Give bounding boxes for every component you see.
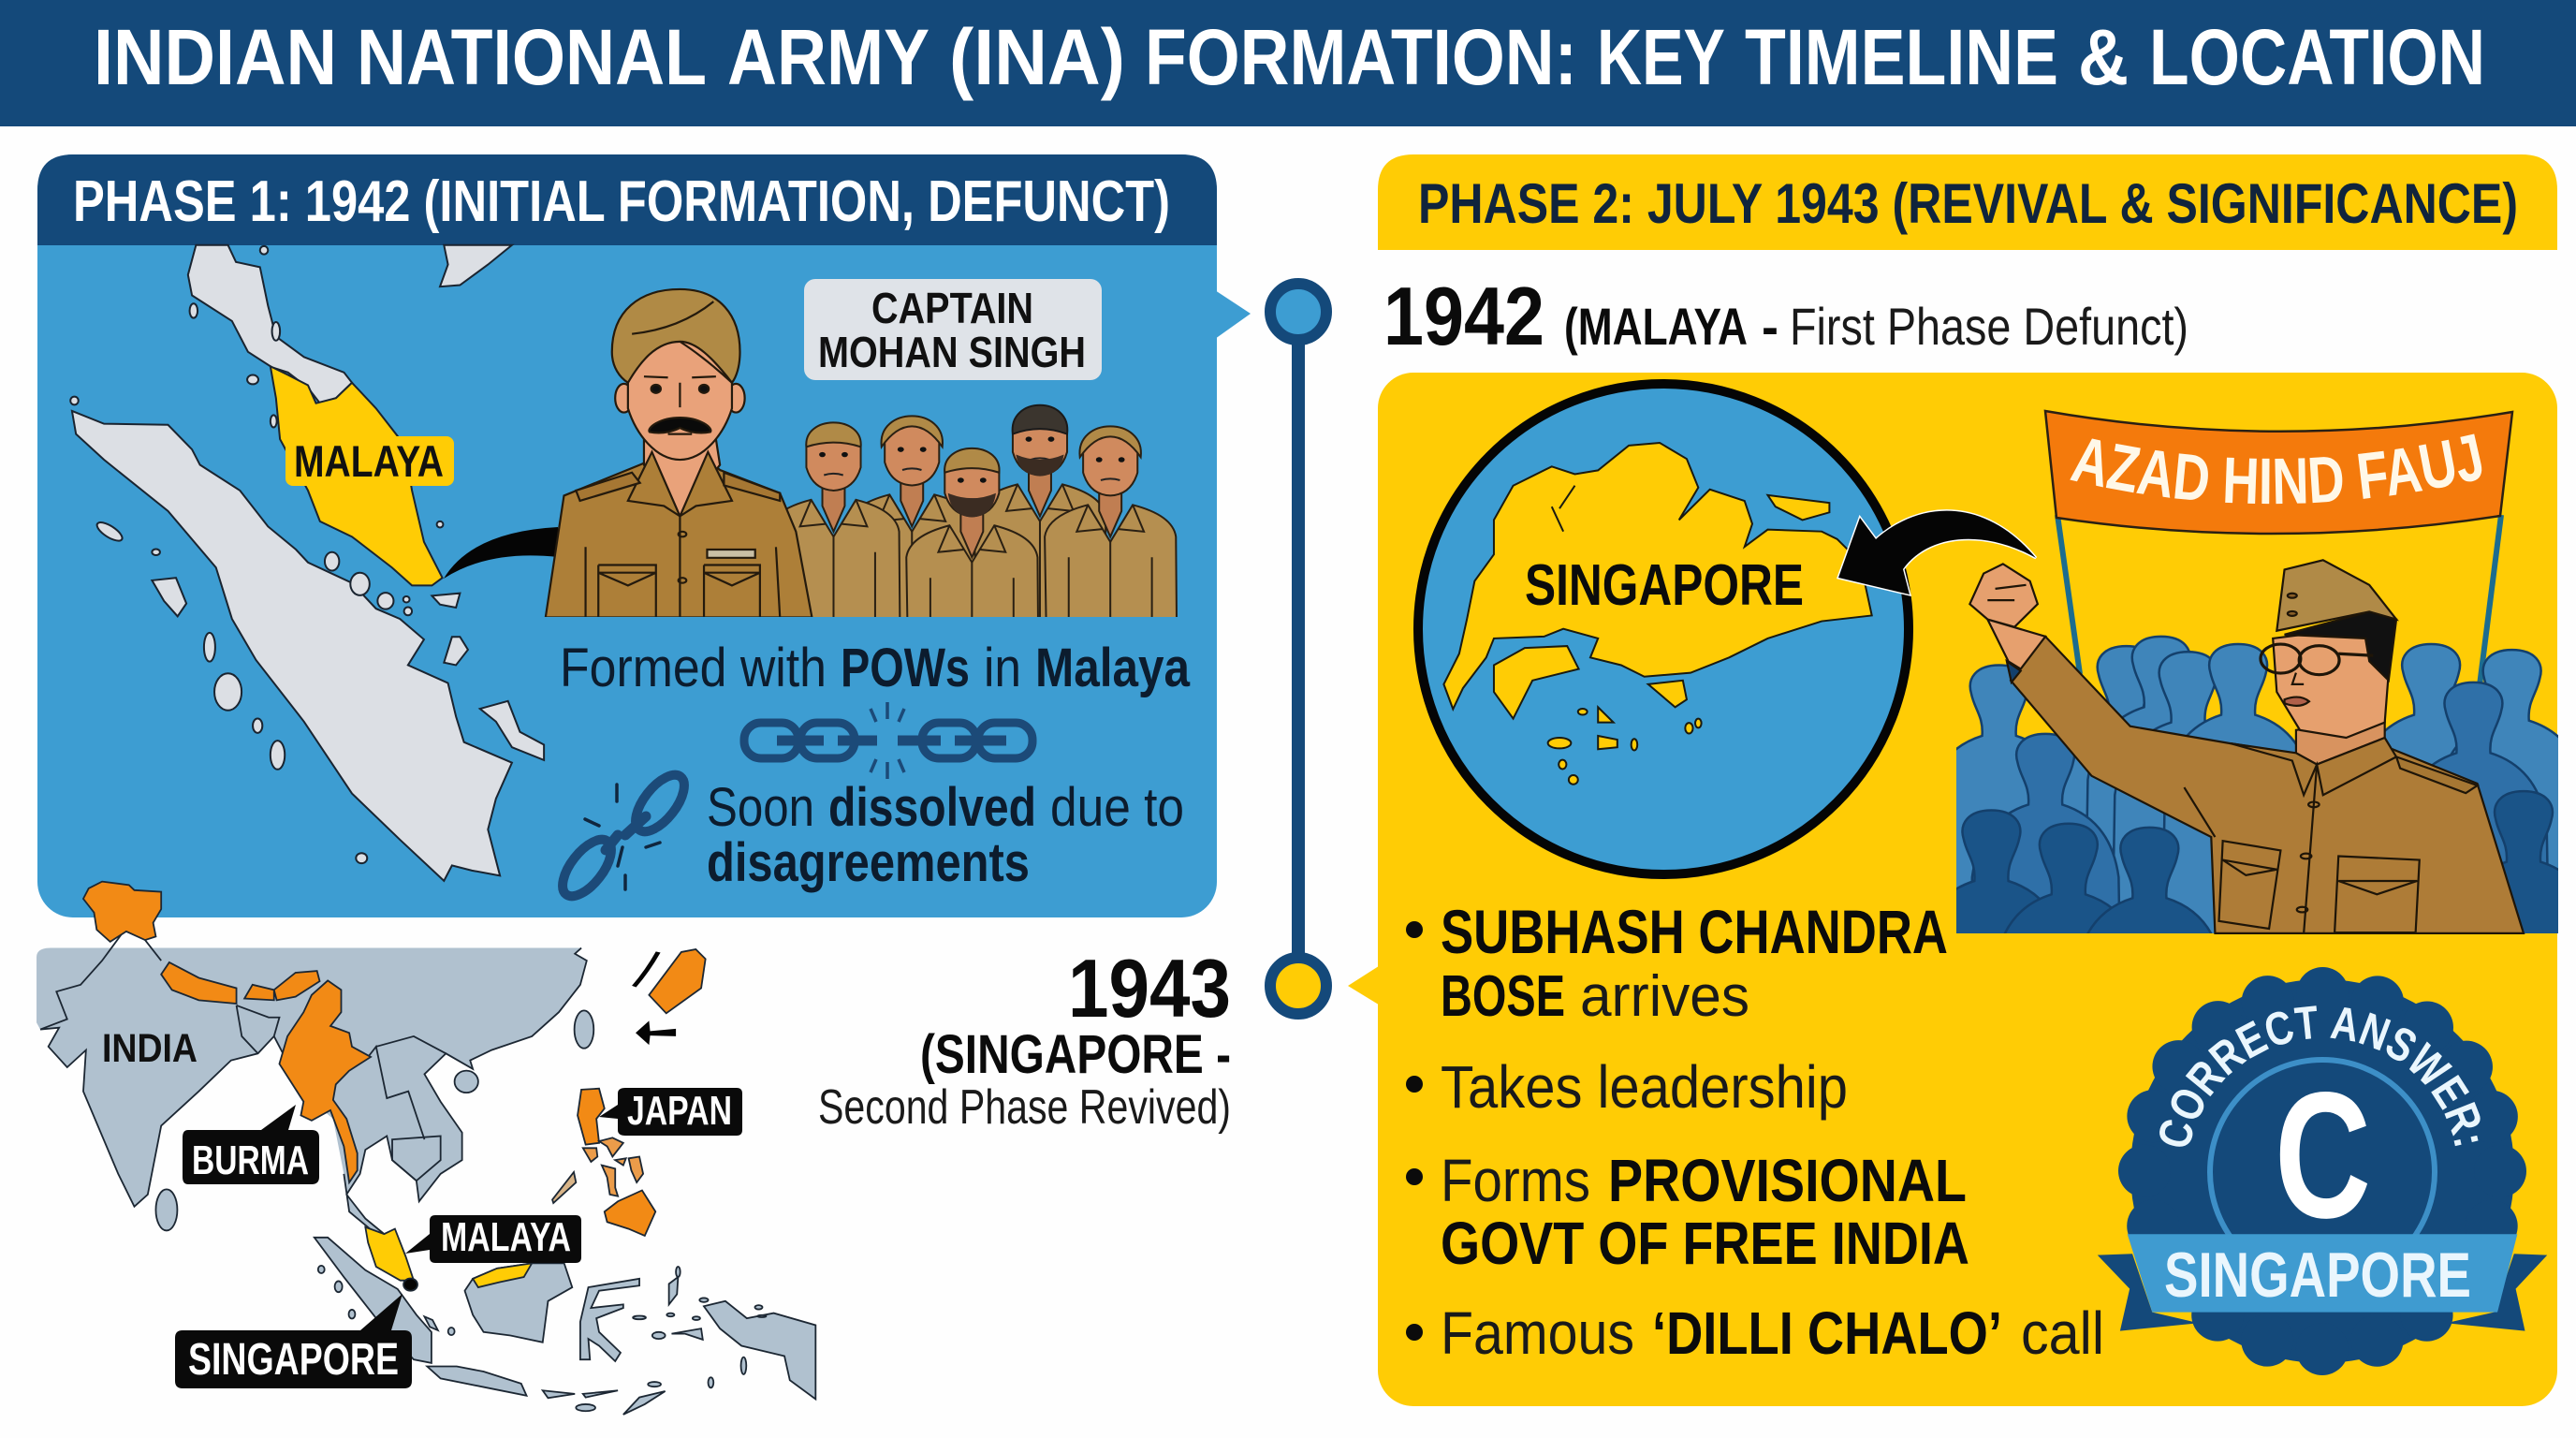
label: Singapore: SINGAPORE (1525, 553, 1804, 618)
map: Singapore circle (1418, 384, 1909, 874)
bullet list: Famous (1441, 1299, 1634, 1367)
label: Singapore (175, 1294, 412, 1388)
title: INDIAN (94, 13, 337, 101)
title: LOCATION (2149, 13, 2485, 101)
panel: phase 2 (1348, 373, 2558, 1406)
text: soon dissolved: Soon (707, 777, 814, 838)
bullet list: call (2021, 1299, 2104, 1367)
text: formed with POWs: Formed with (560, 638, 827, 698)
Sumatra (315, 1238, 432, 1363)
title: (INA) (949, 13, 1125, 101)
badge ribbon: SINGAPORE (2164, 1240, 2471, 1311)
panel: phase 1 (37, 154, 1251, 943)
title (94, 13, 2485, 101)
title: FORMATION: (1145, 13, 1577, 101)
arrow: Malaya to soldiers (444, 527, 558, 579)
label: India: INDIA (102, 1026, 198, 1071)
bullet list: GOVT OF FREE INDIA (1441, 1210, 1969, 1277)
timeline node 1943 (1270, 958, 1326, 1014)
Malaya (365, 1227, 414, 1281)
title: KEY (1597, 13, 1725, 101)
bullet list: PROVISIONAL (1608, 1147, 1967, 1214)
title: ARMY (727, 13, 929, 101)
inner borders (40, 932, 446, 1181)
label: Singapore: SINGAPORE (188, 1335, 399, 1385)
small islands (70, 246, 544, 863)
map: Sumatra and Malaya (70, 245, 558, 881)
year 1943 text (818, 942, 1231, 1135)
bullet list: Takes leadership (1441, 1053, 1848, 1121)
text: formed with POWs (560, 638, 1191, 698)
title: NATIONAL (357, 13, 707, 101)
bullet list: ‘DILLI CHALO’ (1652, 1299, 2002, 1367)
bullet list: Forms (1441, 1147, 1590, 1214)
phase 2 pointer (1348, 964, 1382, 1006)
Captain Mohan Singh figure (546, 289, 812, 617)
icon: broken chain link (553, 767, 694, 904)
label: Captain Mohan Singh: MOHAN SINGH (818, 328, 1086, 376)
phase 1 header (37, 154, 1217, 245)
year 1943 text: 1943 (1068, 942, 1231, 1034)
text: soon dissolved: disagreements (707, 832, 1030, 893)
illustration: soldiers with Mohan Singh (546, 289, 1179, 943)
Burma (279, 980, 371, 1182)
label: Captain Mohan Singh: CAPTAIN (871, 284, 1033, 332)
small islands (318, 1266, 767, 1411)
year 1943 text: (SINGAPORE - (920, 1024, 1231, 1085)
year 1942 text: First Phase Defunct) (1790, 297, 2188, 356)
map: Southeast Asia (37, 882, 815, 1415)
badge: correct answer: CORRECT ANSWER: (2159, 1005, 2481, 1147)
MALAYA label: MALAYA (294, 436, 444, 486)
icon: breaking chain (744, 702, 1032, 779)
label: Malaya: MALAYA (441, 1214, 571, 1260)
Thai peninsula (188, 245, 352, 404)
badge: correct answer (2097, 967, 2548, 1375)
year 1943 text: Second Phase Revived) (818, 1080, 1231, 1135)
Nepal and north-east (161, 962, 320, 1004)
mainland (37, 948, 587, 1234)
Java and Lesser Sunda (427, 1367, 666, 1415)
label: Burma (183, 1105, 319, 1184)
timeline (1270, 284, 1326, 1014)
year 1942 text: (MALAYA (1564, 297, 1748, 356)
badge: correct answer: C (2275, 1054, 2371, 1255)
title: TIMELINE (1745, 13, 2058, 101)
Sulawesi (580, 1279, 639, 1361)
label: Malaya (405, 1214, 581, 1263)
badge ribbon (2098, 1234, 2547, 1331)
Kashmir (83, 882, 161, 942)
Malaya region (271, 366, 443, 585)
Sumatra (72, 411, 512, 881)
title bar (0, 0, 2576, 126)
bullet list: SUBHASH CHANDRA (1441, 897, 1948, 966)
label: Burma: BURMA (192, 1137, 309, 1183)
bullet list (1406, 897, 2104, 1367)
offshore islands (1494, 495, 1829, 749)
Singapore island (1443, 443, 1872, 709)
year 1942 text (1383, 270, 2188, 362)
text: formed with POWs: Malaya (1035, 638, 1191, 698)
crowd silhouettes (1914, 637, 2576, 1200)
text: soon dissolved: dissolved (828, 777, 1036, 838)
phase 1 pointer (1215, 290, 1251, 339)
Borneo (465, 1263, 572, 1343)
Philippines region (578, 1089, 605, 1145)
year 1942 text: - (1762, 297, 1778, 356)
banner: Azad Hind Fauj: AZAD HIND FAUJ (2070, 434, 2482, 504)
phase 2 header (1378, 154, 2557, 250)
black arrows by Japan (634, 952, 676, 1045)
Japan (649, 949, 706, 1013)
label: Japan (599, 1088, 742, 1136)
figure: Subhash Chandra Bose (1969, 560, 2524, 933)
text: soon dissolved: due to (1050, 777, 1184, 838)
timeline node 1942 (1270, 284, 1326, 340)
year 1942 text: 1942 (1383, 270, 1544, 362)
island top right (440, 245, 512, 286)
label: Japan: JAPAN (627, 1088, 732, 1134)
text: formed with POWs: POWs (841, 638, 970, 698)
label: Captain Mohan Singh (804, 279, 1102, 380)
islands (155, 1189, 177, 1230)
text: formed with POWs: in (984, 638, 1021, 698)
bullet list: BOSE (1441, 964, 1565, 1029)
arrow: to Singapore (1838, 511, 2036, 594)
bullet list: arrives (1580, 964, 1749, 1029)
phase 1 header: PHASE 1: 1942 (INITIAL FORMATION, DEFUNCT) (73, 169, 1170, 234)
banner poles (2057, 515, 2501, 693)
title: & (2078, 13, 2129, 101)
text: soon dissolved (707, 777, 1184, 893)
New Guinea (704, 1301, 815, 1399)
